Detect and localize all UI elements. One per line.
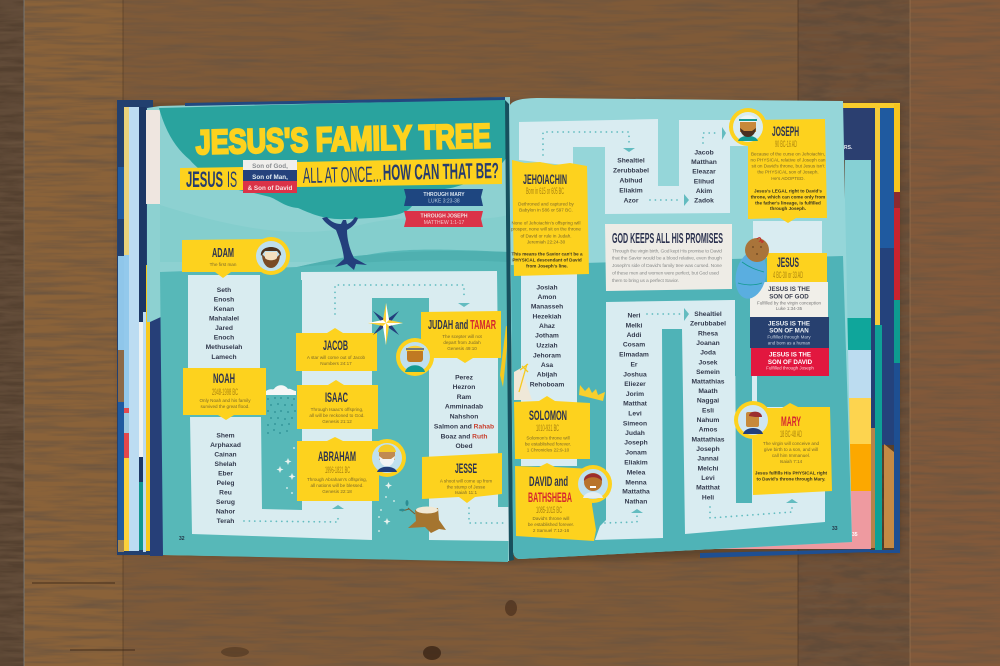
names: Shem to Terah: Shem [216,432,235,440]
banner: Judah and Tamar: The scepter will not [442,334,483,339]
names: Josiah to Rehoboam: Jehoram [533,352,561,360]
names: Neri to Nathan [619,312,650,506]
banner: Noah: survived the great flood. [200,404,250,409]
panel: God keeps all his promises: Through the virgin birth, God kept His promise to David [612,248,722,254]
left page edges [117,100,163,556]
ribbon: through Mary: THROUGH MARY [423,192,465,198]
names: Shealtiel to Heli: Mattathias [691,378,725,386]
names: Adam to Lamech: Lamech [211,354,237,361]
names: Neri to Nathan: Eliezer [624,381,646,388]
banner: Joseph: the PHYSICAL son of Joseph. [757,170,819,174]
banner: Jesse: Isaiah 11:1 [455,490,478,495]
names: Shem to Terah: Peleg [217,480,234,487]
names: Adam to Lamech: Enosh [214,296,234,304]
names: Adam to Lamech: Seth [217,287,231,294]
names: Shem to Terah: Eber [218,470,233,478]
names: Jacob to Zadok: Akim [696,188,712,195]
names: Shealtiel to Heli: Joanan [696,340,720,347]
banner: Jesse: A shoot will come up from [440,478,492,484]
names: Shealtiel to Heli: Joseph [696,446,720,453]
names: Josiah to Rehoboam: Amon [538,294,556,301]
names: Neri to Nathan: Addi [627,332,642,339]
path: upper right lineage [519,119,748,214]
dotted path: Jacob to Judah [335,285,470,314]
right page edges: 35 [852,532,858,538]
stack: Jesus titles: 4 BC-30 or 33 AD [773,270,803,280]
ribbon: through Joseph: THROUGH JOSEPH [421,214,468,220]
ribbon: through Mary: LUKE 3:23-38 [428,198,460,204]
banner: Judah and Tamar: depart from Judah [443,340,481,345]
names: Josiah to Rehoboam: Uzziah [536,342,558,350]
banner: Judah and Tamar: Genesis 49:10 [447,346,477,351]
banner: Jehoiachin: of David or rule in Judah. [520,234,572,238]
path: Shem to Terah and up [190,271,509,541]
names: Shem to Terah: Arphaxad [210,442,241,449]
names: Neri to Nathan: Simeon [623,420,647,428]
right page edges [700,103,900,558]
banner: Judah and Tamar [396,311,501,376]
names: Jacob to Zadok: Zadok [694,198,714,204]
names: Neri to Nathan: Melea [627,470,646,476]
banner: Noah: 2948-1998 BC [212,387,238,397]
title: JESUS'S FAMILY TREE [195,117,491,162]
banner: Abraham: Genesis 22:18 [322,489,352,494]
names: Shealtiel to Heli: Matthat [696,484,721,492]
names: Jacob to Zadok: Jacob [694,150,714,156]
names: Shem to Terah: Shelah [215,461,236,468]
banner: Abraham: all nations will be blessed. [310,483,364,488]
banner: David and Bathsheba: DAVID and [529,473,568,489]
panel: right page [509,98,852,559]
banner: Jehoiachin: None of Jehoiachin's offspring will [512,220,580,226]
names: Shem to Terah: Terah [217,518,234,525]
panel: left page [146,97,510,562]
names: Shealtiel to Heli: Levi [701,475,715,482]
names: Shealtiel to Azor: Eliakim [619,188,643,194]
book shadow [118,104,900,562]
names: Josiah to Rehoboam [530,284,564,388]
names: Adam to Lamech: Mahalalel [209,316,239,322]
row: Son of David [751,348,829,376]
subtitle banner: IS [227,167,237,192]
banner: Noah: NOAH [213,370,235,386]
banner: Joseph: Because of the curse on Jehoiachin, [751,152,825,156]
page number 32: 32 [179,536,185,542]
names: Shealtiel to Heli: Melchi [698,466,719,472]
row: Son of Man: and born as a human [768,340,811,346]
row: Son of Man: JESUS IS THE [768,320,810,328]
banner: Abraham [297,437,406,501]
names: Shem to Terah [210,432,241,525]
banner: Jesse: the stump of Jesse [447,484,486,490]
subtitle banner: HOW CAN THAT BE? [383,158,499,185]
banner: Solomon: be established forever. [525,442,571,446]
names: Shealtiel to Heli: Zerubbabel [690,320,726,328]
names: Shealtiel to Heli: Heli [702,494,714,502]
names: Josiah to Rehoboam: Abijah [537,372,557,378]
row: Son of God: Luke 1:34-35 [776,306,803,311]
row: Son of David: JESUS IS THE [769,352,811,358]
banner: Solomon [514,396,590,459]
row: Son of Man: Fulfilled through Mary [767,334,811,340]
banner: Jehoiachin: prosper, none will sit on the throne [511,226,581,232]
panel: God keeps all his promises: GOD KEEPS ALL HIS PROMISES [612,230,723,247]
names: Josiah to Rehoboam: Ahaz [539,323,556,330]
banner: Jehoiachin: Born in 615 or 605 BC [526,186,564,196]
icon: crown [579,385,605,401]
banner: Solomon: 1 Chronicles 22:9-10 [527,448,570,452]
names: Shealtiel to Heli: Nahum [697,417,719,424]
names: Shem to Terah: Serug [216,499,235,506]
banner: Noah [183,368,266,420]
names: Neri to Nathan: Jonam [625,450,647,456]
banner: Jesse: JESSE [455,460,477,476]
banner: Joseph [729,108,827,223]
banner: Jehoiachin: PHYSICAL descendant of David [512,258,582,262]
names: Shealtiel to Heli: Semein [696,369,720,376]
banner: David and Bathsheba: BATHSHEBA [528,489,572,505]
stack: Jesus titles [750,253,829,376]
icon: sparkles [276,447,395,532]
names: Neri to Nathan: Neri [627,312,641,320]
banner: Isaac: all will be reckoned to God. [309,413,365,418]
subtitle banner: ALL AT ONCE... [303,162,382,188]
banner: Joseph: the father's lineage, is fulfilled [755,200,821,206]
names: Neri to Nathan: Menna [625,480,647,486]
names: Neri to Nathan: Levi [628,410,642,418]
names: Perez to Obed: Ram [457,394,471,401]
names: Perez to Obed: Hezron [453,384,475,391]
names: Josiah to Rehoboam: Rehoboam [530,382,564,388]
tree trunk [322,217,367,270]
banner: David and Bathsheba: 2 Samuel 7:12-16 [533,528,570,533]
names: Josiah to Rehoboam: Josiah [536,284,558,292]
banner: Jehoiachin: JEHOIACHIN [523,171,567,187]
three titles box: Son of God, [252,163,288,170]
row: Son of David: Fulfilled through Joseph [766,366,814,370]
names: Neri to Nathan: Nathan [625,498,647,506]
portrait: Joseph [729,108,767,146]
names: Neri to Nathan: Mattatha [622,488,650,496]
three titles box: Son of Man, [252,174,288,181]
names: Shealtiel to Heli: Maath [698,388,718,395]
banner: Jehoiachin: This means the Savior can't be a [511,252,583,256]
page number 33: 33 [832,526,838,532]
subtitle banner: JESUS [186,167,223,192]
banner: Jacob: Numbers 24:17 [320,361,352,366]
portrait: Judah [396,338,434,376]
banner: Jehoiachin: Babylon in 586 or 597 BC. [519,208,573,212]
panel: God keeps all his promises: Joseph's side of David's family tree was cursed. None [612,263,722,269]
names: Josiah to Rehoboam: Hezekiah [532,314,562,320]
banner: David and Bathsheba: 1085-1015 BC [536,505,562,515]
banner: Jehoiachin: from Joseph's line. [526,264,568,268]
portrait: Mary [734,401,772,439]
names: Perez to Obed: Obed [455,443,473,450]
names: Shealtiel to Heli: Amos [699,426,718,434]
banner: Adam: The first man [210,262,237,267]
names: Shem to Terah: Cainan [214,452,237,458]
banner: Mary: The virgin will conceive and [763,441,820,446]
cream page strip [146,110,160,204]
tree canopy [159,99,508,219]
icon: sword and scroll [514,364,532,400]
dotted paths: right page [543,127,798,523]
teal slot beside Heli column [735,300,757,503]
banner: Joseph: JOSEPH [772,123,799,139]
names: Shealtiel to Azor: Zerubbabel [613,168,649,174]
path: Luke genealogy columns [595,300,825,540]
banner: Joseph: through Joseph. [770,206,806,211]
panel: God keeps all his promises: that the Savior would be a blood relative, even though [612,256,722,262]
banner: Jehoiachin: Jeremiah 22:24-30 [527,240,566,244]
banner: Abraham: ABRAHAM [318,449,356,464]
banner: David and Bathsheba [515,463,612,541]
names: Adam to Lamech: Kenan [214,306,234,313]
three titles box: & Son of David [248,185,293,192]
names: Neri to Nathan: Matthat [623,400,648,408]
portrait: Adam [252,237,290,275]
names: Neri to Nathan: Elmadam [619,352,649,358]
names: Neri to Nathan: Cosam [623,342,645,348]
banner: Joseph: no PHYSICAL relative of Joseph can [751,158,826,162]
names: Neri to Nathan: Melki [626,322,643,330]
banner: David and Bathsheba: be established forever. [528,522,574,527]
names: Shealtiel to Heli: Esli [702,408,714,414]
names: Perez to Obed: Perez [455,374,474,382]
names: Jacob to Zadok [691,150,717,204]
gutter [505,100,514,561]
ribbon: through Mary [404,189,483,206]
row: Son of Man [750,317,829,348]
three titles box [243,160,297,193]
portrait: Abraham [368,439,406,477]
names: Shealtiel to Heli: Naggai [697,398,719,404]
banner: Noah: Only Noah and his family [199,398,251,403]
names: Shealtiel to Heli: Josek [699,360,718,366]
names: Perez to Obed: Salmon and Rahab [434,424,494,430]
subtitle banner [180,158,502,193]
icon: flood cloud and rain [266,385,296,434]
names: Shealtiel to Azor: Shealtiel [617,158,645,164]
path: Joseph to Jesus [753,221,822,254]
names: Shem to Terah: Nahor [216,508,236,516]
names: Adam to Lamech [206,287,242,361]
banner: Isaac [297,380,378,429]
dotted path: Jesse to next page [469,508,508,523]
banner: David and Bathsheba: David's throne will [533,516,569,521]
names: Shealtiel to Heli: Jannai [697,456,719,462]
icon: star [368,303,403,345]
names: Jacob to Zadok: Eleazar [692,168,716,176]
banner: Joseph: throne, which can come only from [751,194,825,200]
ribbon: through Joseph: MATTHEW 1:1-17 [424,220,464,226]
banner: Mary: MARY [781,413,801,429]
row: Son of Man: SON OF MAN [769,328,809,334]
row: Son of God [750,282,828,317]
row: Son of God: Fulfilled by the virgin conception [757,300,822,306]
banner: Mary [734,401,832,495]
row: Son of God: SON OF GOD [769,294,809,300]
banner: Jesse [422,453,502,503]
ribbon: through Joseph [404,211,483,227]
names: Shealtiel to Heli: Rhesa [698,330,718,338]
banner: Adam: ADAM [212,246,234,260]
names: Perez to Obed: Boaz and Ruth [441,434,487,440]
banner: Joseph: 90 BC-16 AD [775,139,797,149]
banner: Mary: call him Immanuel. [772,453,810,458]
names: Shealtiel to Heli: Joda [700,350,716,356]
names: Adam to Lamech: Methuselah [206,344,242,351]
names: Perez to Obed: Amminadab [445,404,483,410]
names: Neri to Nathan: Joshua [623,372,647,378]
banner: Isaac: Genesis 21:12 [322,419,352,424]
banner: Joseph: Jesus's LEGAL right to David's [754,188,822,194]
banner: Isaac: ISAAC [325,390,348,405]
sky wave band [160,205,508,262]
banner: Jehoiachin: Dethroned and captured by [518,202,575,206]
banner: Joseph: He's ADOPTED. [771,176,805,181]
names: Neri to Nathan: Eliakim [624,460,648,466]
banner: Jacob [296,328,377,371]
banner: Jacob: JACOB [323,338,348,353]
icon: tree stump [399,500,446,533]
banner: Judah and Tamar: JUDAH and TAMAR [428,317,496,332]
icon: baby Jesus [731,238,771,302]
banner: Mary: 18 BC-48 AD [780,429,802,439]
portrait: David [574,465,612,503]
banner: Mary: to David's throne through Mary. [757,476,825,482]
right page edges: RS. [844,145,853,151]
yellow sword line [500,326,509,387]
names: Shealtiel to Heli [690,311,726,502]
banner: Mary: Jesus fulfills His PHYSICAL right [755,470,828,476]
names: Neri to Nathan: Jorim [626,391,644,398]
panel: God keeps all his promises [605,224,732,291]
path: Adam to Lamech column [188,275,260,368]
names: Shealtiel to Azor [613,158,649,204]
banner: Mary: give birth to a son, and will [764,447,818,452]
banner: Adam [182,237,290,278]
banner: Abraham: Through Abraham's offspring, [307,477,367,482]
stack: Jesus titles: JESUS [777,254,799,270]
names: Adam to Lamech: Enoch [214,334,234,342]
names: Neri to Nathan: Judah [625,430,645,437]
panel: God keeps all his promises: of these men and women were perfect, but God used [612,270,719,276]
banner: Jacob: A star will come out of Jacob [307,355,366,360]
names: Perez to Obed: Nahshon [450,414,478,420]
dotted path: Terah to Abraham [244,505,344,522]
path: Josiah to Rehoboam [521,270,577,466]
names: Josiah to Rehoboam: Manasseh [531,304,563,310]
names: Shealtiel to Azor: Azor [624,198,639,204]
names: Josiah to Rehoboam: Jotham [535,332,559,340]
row: Son of God: JESUS IS THE [768,286,810,293]
names: Perez to Obed [434,374,494,450]
names: Josiah to Rehoboam: Asa [541,362,553,369]
names: Shem to Terah: Reu [219,490,232,496]
names: Shealtiel to Azor: Abihud [619,178,643,184]
names: Neri to Nathan: Joseph [624,440,648,446]
banner: Solomon: Solomon's throne will [526,436,570,440]
banner: Isaac: Through Isaac's offspring, [311,407,363,412]
banner: Solomon: SOLOMON [529,407,567,423]
panel: God keeps all his promises: them to bring us a perfect Savior. [612,278,679,284]
banner: Mary: Isaiah 7:14 [780,459,803,464]
names: Jacob to Zadok: Elihud [694,178,714,186]
ground hill [160,250,508,562]
row: Son of David: SON OF DAVID [768,359,813,366]
names: Jacob to Zadok: Matthan [691,159,717,166]
banner: Solomon: 1010-931 BC [536,423,559,433]
names: Neri to Nathan: Er [630,362,638,368]
names: Adam to Lamech: Jared [215,325,233,332]
names: Shealtiel to Heli: Shealtiel [694,311,722,318]
names: Shealtiel to Heli: Mattathias [691,436,725,444]
banner: Abraham: 1996-1821 BC [325,465,350,475]
banner: Joseph: sit on David's throne, but Jesus isn't [752,164,825,168]
banner: Jehoiachin [511,160,589,276]
